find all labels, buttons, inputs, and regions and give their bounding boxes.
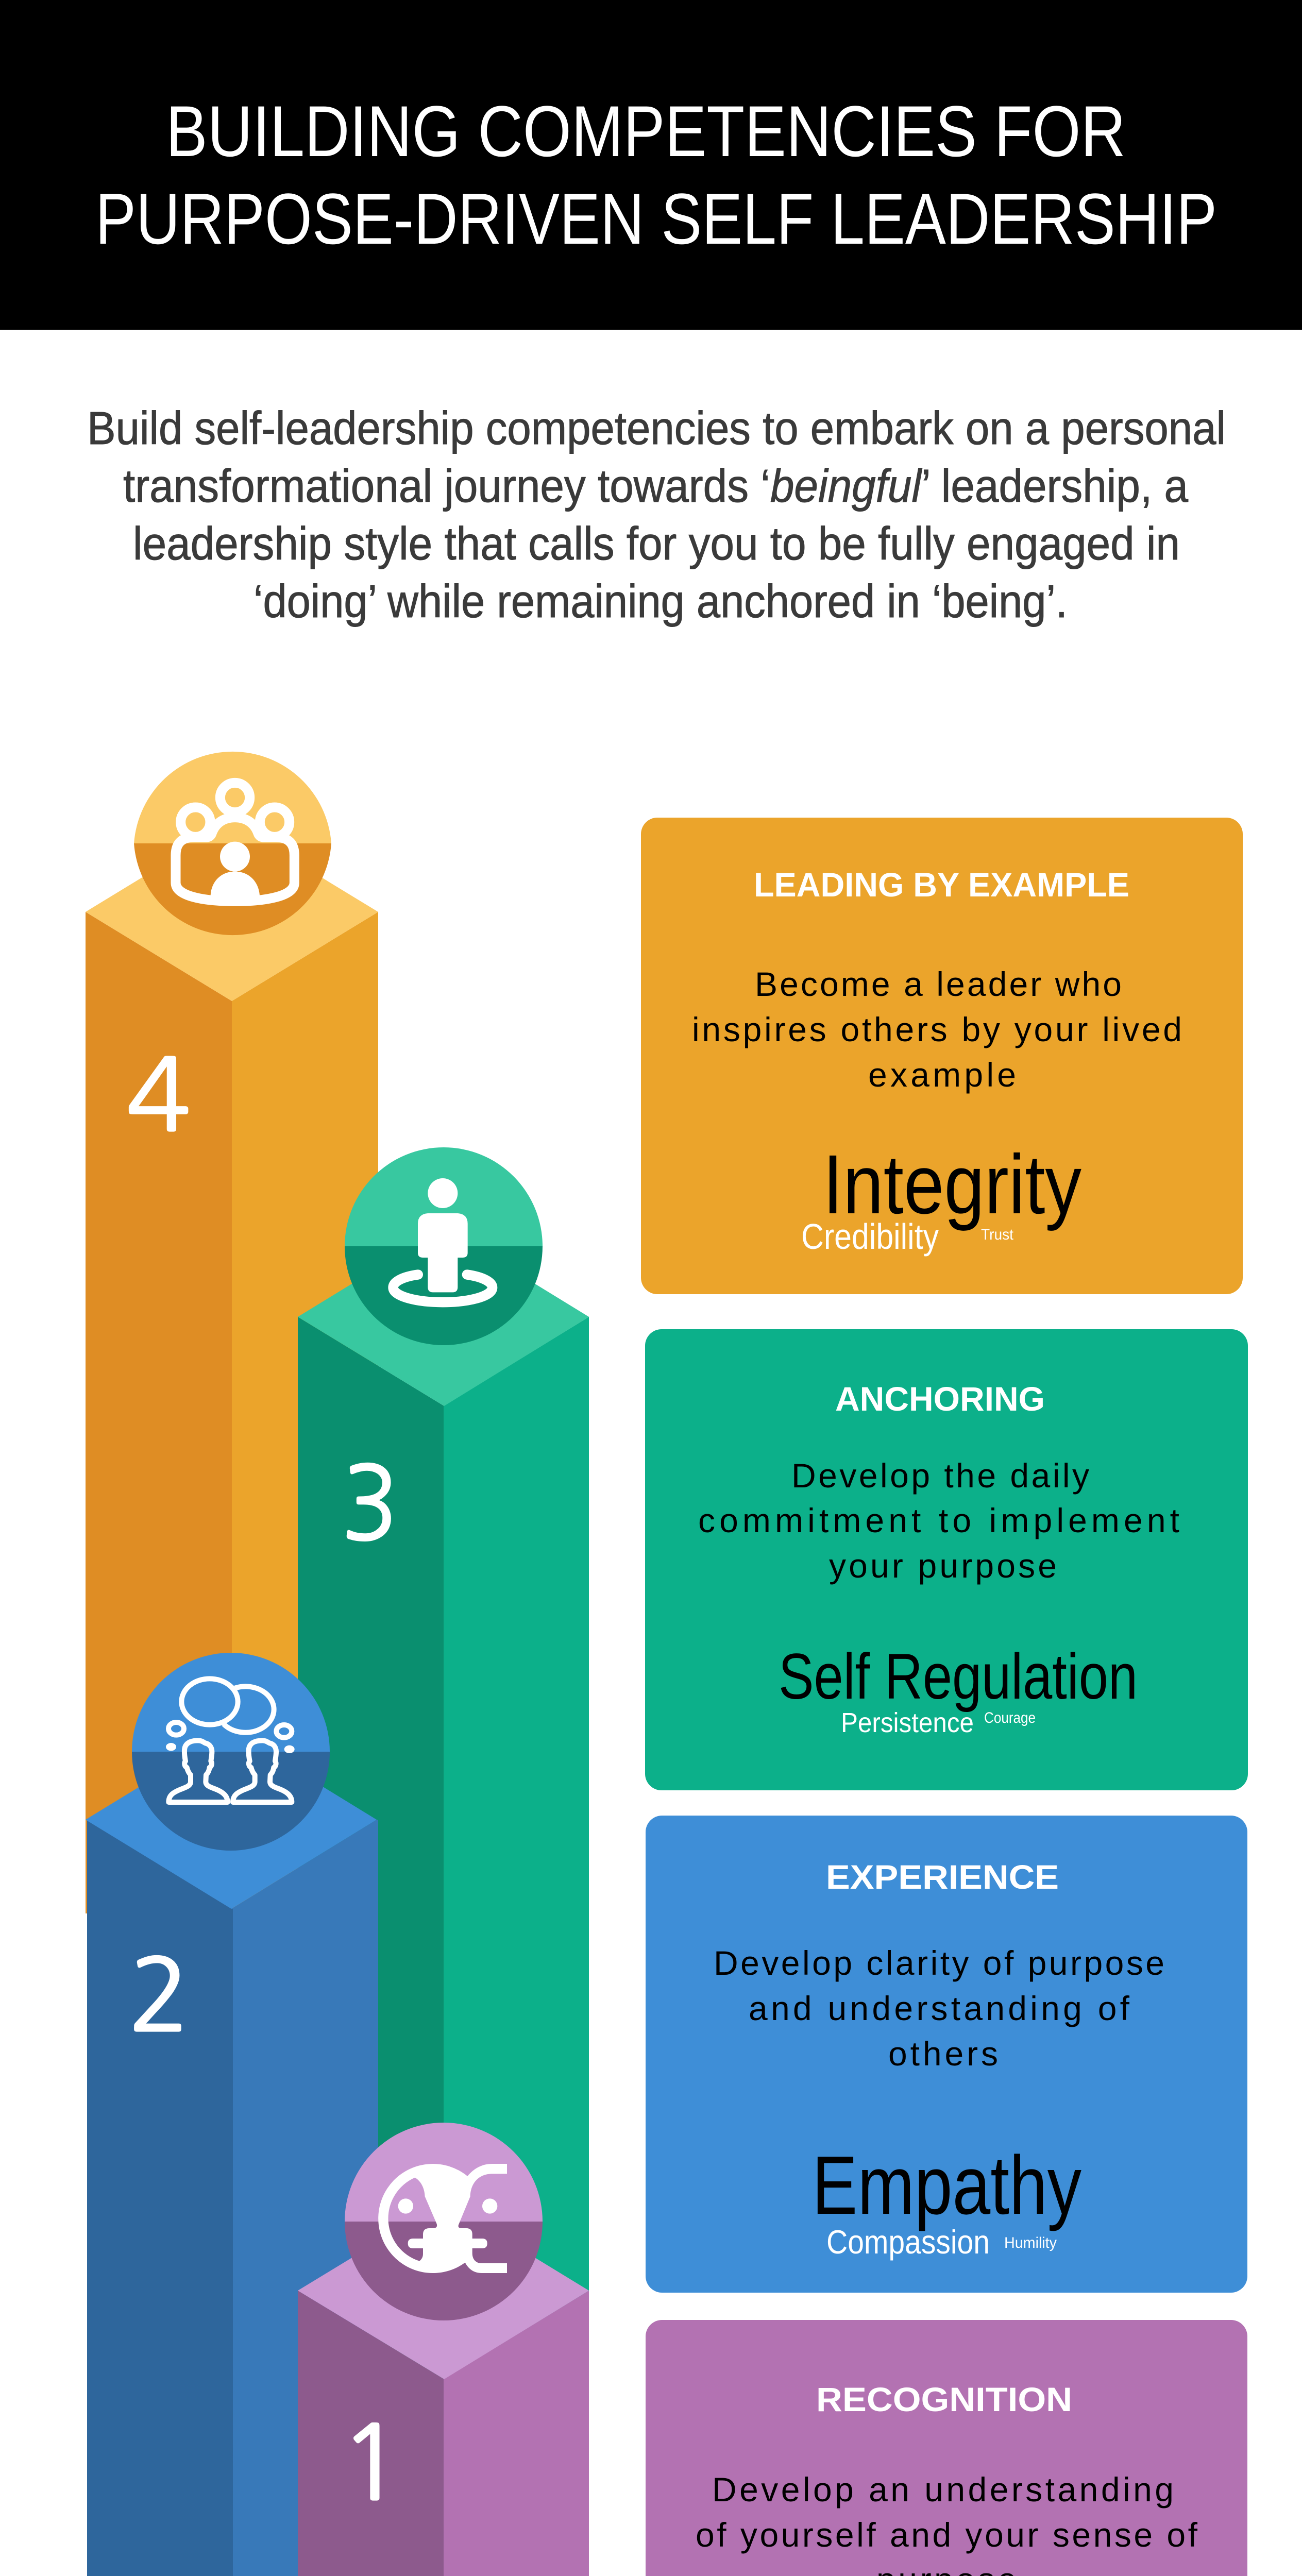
description (698, 1456, 1179, 1585)
competency words (801, 1137, 1081, 1257)
icon: two people talking (132, 1653, 330, 1851)
competency words (779, 1641, 1138, 1738)
intro text block (87, 403, 1226, 628)
description: of yourself and your sense of (696, 2516, 1198, 2554)
heading: anchoring: ANCHORING (835, 1380, 1045, 1418)
competency words: Humility (1004, 2234, 1057, 2251)
description: your purpose (829, 1547, 1057, 1585)
title (95, 91, 1217, 259)
pillar 1: purple column (298, 2123, 589, 2576)
panel: recognition (646, 2320, 1247, 2576)
description: Develop an understanding (712, 2470, 1174, 2509)
number 3: 3 (342, 1453, 398, 1554)
heading: recognition: RECOGNITION (816, 2380, 1072, 2418)
competency words: Integrity (823, 1137, 1081, 1231)
description: and understanding of (749, 1989, 1130, 2027)
competency words (812, 2139, 1081, 2261)
description (696, 2470, 1198, 2576)
competency words: Trust (981, 1226, 1014, 1243)
panel: anchoring (645, 1329, 1248, 1790)
competency words: Persistence (841, 1707, 974, 1738)
description: inspires others by your lived (692, 1010, 1182, 1048)
title: BUILDING COMPETENCIES FOR (166, 91, 1126, 172)
panel: leading by example (641, 818, 1243, 1294)
competency words: Credibility (801, 1216, 939, 1257)
pillar 4: orange column (86, 752, 378, 1913)
competency words: Compassion (826, 2223, 990, 2261)
description: Become a leader who (755, 965, 1122, 1003)
competency words: Empathy (812, 2139, 1081, 2232)
description (692, 965, 1182, 1094)
competency words: Courage (984, 1709, 1036, 1726)
number 4: 4 (126, 1046, 191, 1145)
description: commitment to implement (698, 1501, 1179, 1539)
pillar 2: blue column (86, 1653, 378, 2576)
description: Develop the daily (791, 1456, 1089, 1495)
description: others (888, 2035, 998, 2073)
competency words: Self Regulation (779, 1641, 1138, 1713)
header band with title (0, 0, 1302, 330)
heading: leading by example: LEADING BY EXAMPLE (754, 866, 1129, 904)
heading: experience: EXPERIENCE (826, 1858, 1059, 1896)
icon: leader with group (134, 752, 331, 935)
number 2: 2 (129, 1946, 190, 2045)
intro text block: Build self-leadership competencies to embark on a personal (87, 403, 1226, 454)
icon: person in circle (345, 1147, 543, 1345)
number 1: 1 (340, 2412, 403, 2514)
panel: experience (646, 1816, 1247, 2293)
description: example (868, 1056, 1016, 1094)
description: Develop clarity of purpose (714, 1944, 1164, 1982)
description (714, 1944, 1164, 2073)
intro text block: ‘doing’ while remaining anchored in ‘being’. (253, 576, 1068, 628)
intro text block: transformational journey towards ‘beingful’ leadership, a (123, 461, 1189, 512)
intro text block: leadership style that calls for you to be fully engaged in (133, 518, 1180, 570)
icon: face reflection (345, 2123, 543, 2320)
pillar 3: green column (298, 1147, 589, 2421)
